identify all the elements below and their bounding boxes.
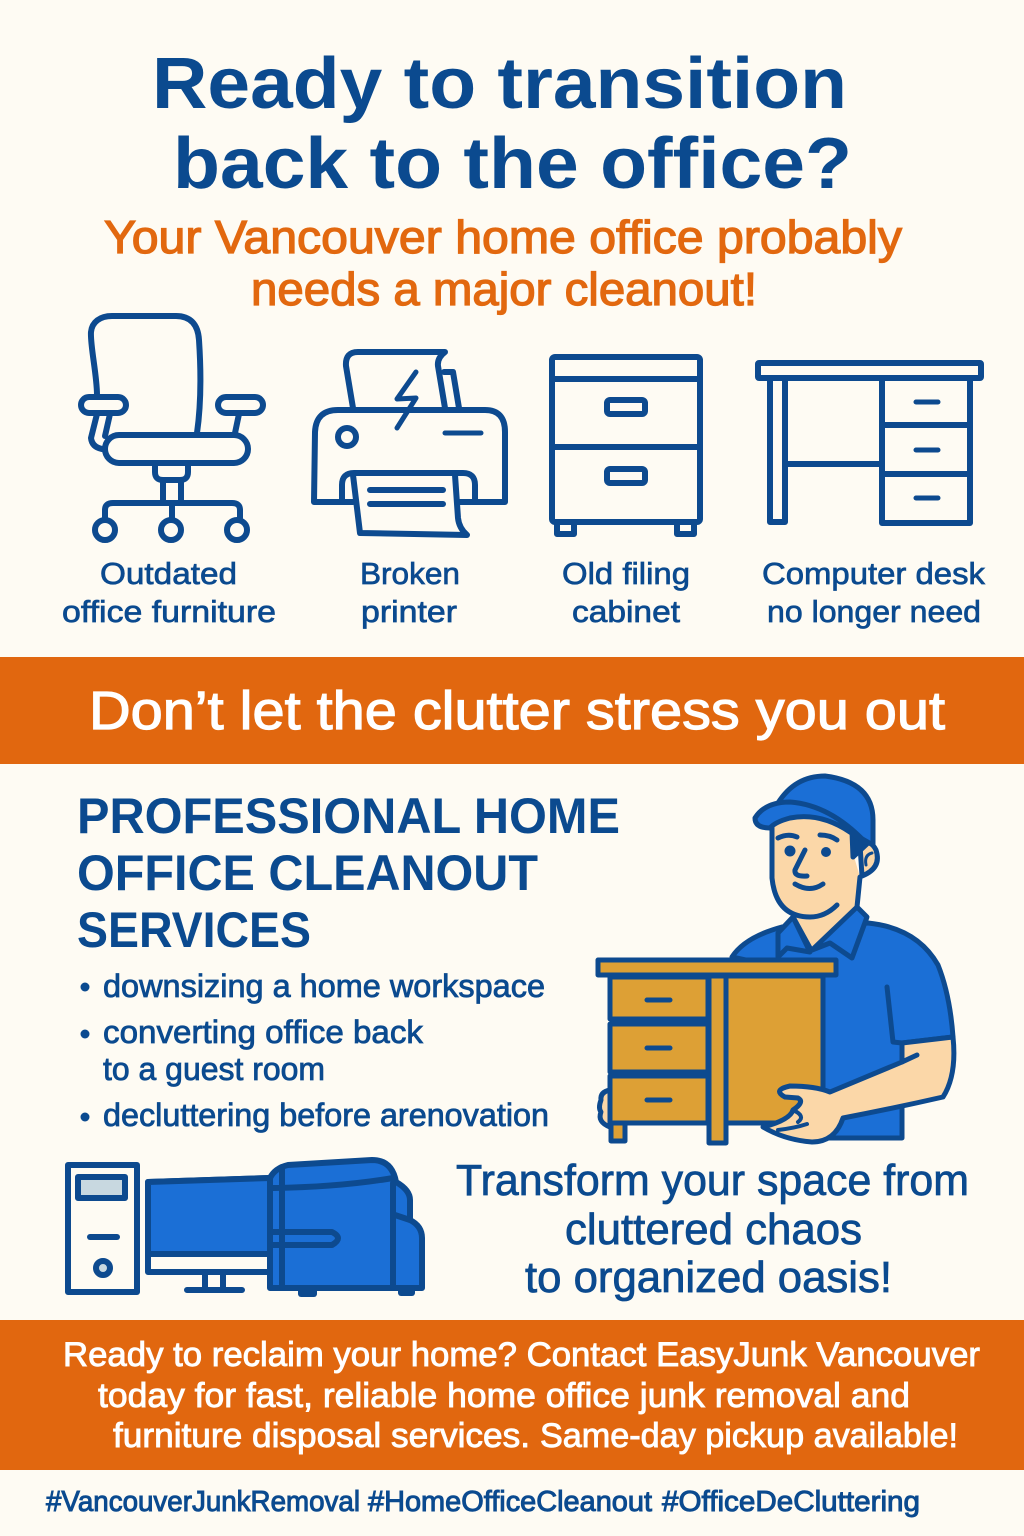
arm crease (902, 1055, 917, 1062)
banner: call to action (0, 1320, 1024, 1470)
services heading (77, 788, 620, 958)
item labels: Old filing (562, 556, 690, 591)
banner: call to action: today for fast, reliable home office junk removal and (98, 1377, 910, 1415)
icon: computer desk (758, 363, 981, 523)
arm and hand (763, 1037, 954, 1142)
icon: filing cabinet (552, 357, 700, 534)
desk side panel (726, 976, 823, 1123)
icon: broken printer (314, 352, 505, 535)
transform message: to organized oasis! (525, 1253, 892, 1302)
subtitle: needs a major cleanout! (251, 263, 757, 315)
ear curl (866, 853, 872, 865)
drawer handles (647, 1000, 670, 1100)
sleeve fold (887, 987, 902, 1043)
transform message: cluttered chaos (565, 1205, 862, 1254)
desk leg (709, 976, 726, 1143)
item labels: Computer desk (762, 556, 986, 591)
facial lines (778, 835, 837, 888)
item labels: office furniture (62, 594, 276, 629)
item labels: Broken (360, 556, 460, 591)
item labels: cabinet (572, 594, 680, 629)
hashtags: #VancouverJunkRemoval (46, 1486, 360, 1518)
banner: clutter stress (0, 657, 1024, 764)
services list (80, 968, 549, 1133)
desk top (598, 960, 836, 975)
collar (778, 907, 867, 958)
services heading: PROFESSIONAL HOME (77, 788, 620, 844)
services list: decluttering before arenovation (103, 1097, 549, 1133)
subtitle: Your Vancouver home office probably (104, 211, 902, 263)
hashtags (46, 1486, 920, 1518)
transform message (456, 1156, 969, 1302)
title: Ready to transition (152, 44, 847, 124)
services list: to a guest room (103, 1051, 325, 1087)
icon: armchair (270, 1160, 422, 1294)
services list: downsizing a home workspace (103, 968, 545, 1004)
item labels: printer (361, 594, 457, 629)
neck and face (772, 813, 860, 950)
shirt (732, 923, 953, 1138)
left fingers (600, 1090, 610, 1127)
illustration: worker carrying desk (598, 776, 954, 1143)
item labels: no longer need (767, 594, 981, 629)
hashtags: #OfficeDeCluttering (662, 1486, 920, 1518)
cap brim (755, 802, 865, 842)
transform message: Transform your space from (456, 1156, 969, 1205)
title: back to the office? (173, 124, 852, 204)
services heading: SERVICES (77, 902, 311, 958)
services list: converting office back (103, 1014, 424, 1050)
banner: clutter stress: Don’t let the clutter stress you out (89, 681, 945, 741)
foot (611, 1123, 625, 1141)
hashtags: #HomeOfficeCleanout (368, 1486, 652, 1518)
item labels (62, 556, 986, 629)
icon: computer tower (68, 1165, 137, 1292)
ear (860, 842, 877, 876)
icon: office chair (81, 316, 263, 540)
title (152, 44, 852, 204)
fingers (778, 1110, 807, 1130)
icon: monitor (148, 1178, 270, 1290)
banner: call to action: Ready to reclaim your home? Contact EasyJunk Vancouver (63, 1336, 980, 1374)
services heading: OFFICE CLEANOUT (77, 845, 538, 901)
item labels: Outdated (100, 556, 237, 591)
eyes (787, 848, 793, 854)
cap (778, 776, 873, 845)
banner: call to action: furniture disposal services. (113, 1417, 530, 1455)
hair (852, 832, 868, 857)
face outline (772, 827, 860, 948)
banner: call to action: Same-day pickup available! (540, 1417, 958, 1455)
subtitle (104, 211, 902, 315)
desk drawers (610, 977, 708, 1019)
